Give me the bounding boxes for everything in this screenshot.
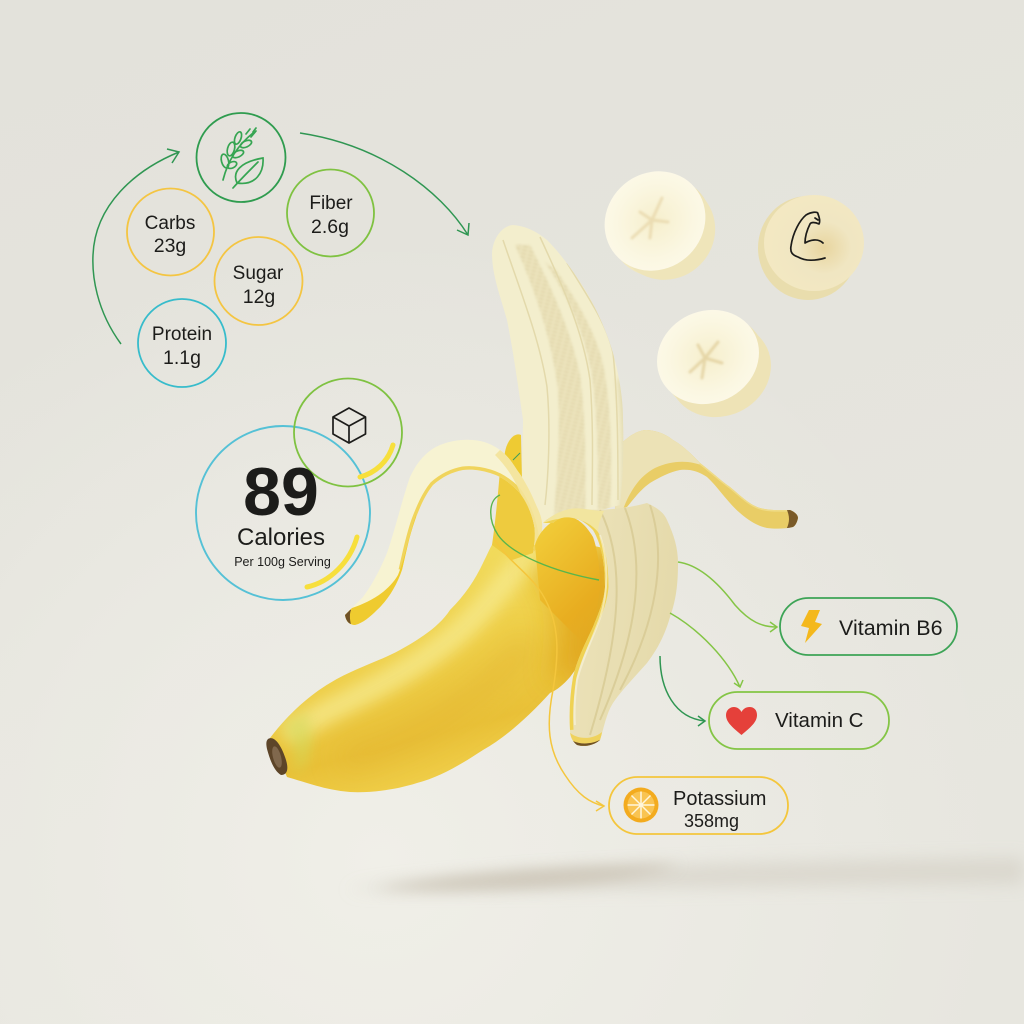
fruit ribbing bbox=[515, 245, 611, 520]
nutrient: sugar bbox=[214, 237, 302, 325]
pill: vitamin b6 bbox=[780, 598, 957, 655]
connector: green over banana bbox=[491, 453, 599, 580]
icon: cube bbox=[333, 408, 366, 443]
nutrient: carbs bbox=[127, 188, 214, 276]
pill: vitamin c: Vitamin C bbox=[775, 709, 864, 732]
stem bbox=[266, 738, 287, 775]
icon: orange slice bbox=[624, 788, 658, 822]
icon: leaf sprig bbox=[220, 128, 263, 188]
green ring bbox=[294, 378, 402, 486]
banana slice: top left bbox=[584, 151, 735, 300]
nutrient: carbs: 23g bbox=[154, 235, 186, 257]
nutrient: protein: Protein bbox=[152, 324, 212, 345]
floor shadow bbox=[345, 858, 1024, 890]
pill: vitamin c bbox=[709, 692, 889, 749]
banana slice: top right bbox=[758, 195, 864, 300]
pill: potassium: 358mg bbox=[684, 811, 739, 831]
connector: vitamin b6 bbox=[678, 562, 777, 632]
peel: front bbox=[543, 503, 678, 746]
nutrient: leaf icon circle bbox=[196, 113, 286, 202]
peel: right bbox=[615, 430, 798, 529]
nutrient: fiber bbox=[287, 170, 374, 256]
icon: heart bbox=[726, 707, 757, 735]
fruit bbox=[492, 225, 624, 525]
calories panel bbox=[196, 378, 402, 600]
icon: bolt bbox=[801, 610, 822, 643]
blue ring bbox=[196, 426, 370, 600]
pill: potassium: Potassium bbox=[673, 788, 766, 810]
peel: front inner bbox=[535, 517, 600, 650]
connector: vitamin c bbox=[670, 613, 743, 687]
connector: dark green bbox=[660, 656, 705, 726]
connector: potassium bbox=[495, 540, 604, 811]
banana bbox=[260, 220, 805, 800]
calories number: 89 bbox=[243, 454, 319, 530]
nutrient: sugar: 12g bbox=[243, 286, 275, 308]
pill: potassium bbox=[609, 777, 788, 834]
arrow: left green curve bbox=[93, 149, 179, 344]
nutrient: sugar: Sugar bbox=[233, 263, 284, 284]
yellow arcs bbox=[307, 445, 393, 587]
pill: vitamin b6: Vitamin B6 bbox=[839, 616, 943, 640]
arrow: right green curve bbox=[300, 133, 469, 235]
icon: flexed arm bbox=[791, 212, 825, 260]
serving label: Per 100g Serving bbox=[234, 555, 331, 569]
peel: left bbox=[345, 440, 542, 625]
nutrient: fiber: 2.6g bbox=[311, 216, 349, 238]
nutrient: protein bbox=[138, 299, 226, 387]
peel: back yellow bbox=[498, 434, 522, 520]
body bbox=[270, 544, 605, 792]
nutrient: carbs: Carbs bbox=[145, 213, 195, 234]
calories label: Calories bbox=[237, 524, 325, 551]
nutrient: protein: 1.1g bbox=[163, 347, 201, 369]
nutrient: fiber: Fiber bbox=[309, 193, 353, 214]
banana slice: bottom bbox=[641, 293, 787, 434]
peel: left inner yellow bbox=[492, 470, 535, 560]
